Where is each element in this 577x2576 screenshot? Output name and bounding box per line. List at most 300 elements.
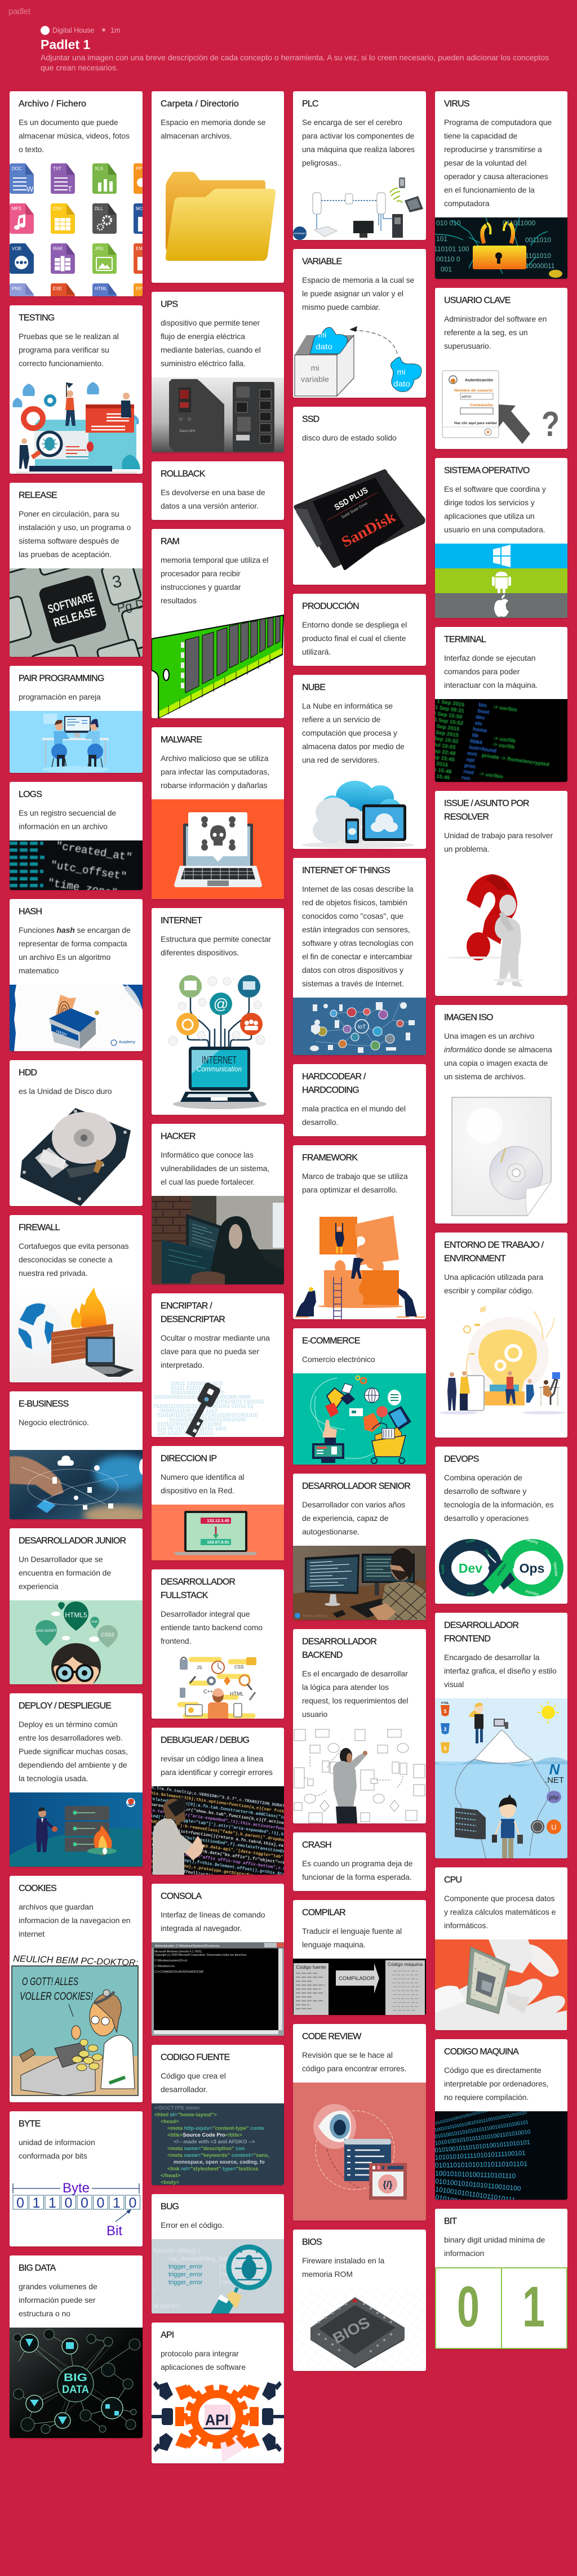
card: DEVOPS [435, 1447, 567, 1604]
image: fullstack developer illustration: C++ [203, 1689, 213, 1694]
card text [444, 312, 547, 353]
image: circuit with padlock: 101 [436, 235, 447, 243]
card text: Informático que conoce las [161, 1150, 254, 1159]
image: byte diagram: 0 [129, 2195, 136, 2211]
image: DevOps infinity loop: deploy [526, 1537, 539, 1545]
image: byte diagram: Byte [63, 2181, 90, 2196]
card text: Puede significar muchas cosas, [19, 1747, 128, 1756]
image: magnifier over bug: var_dump(debug_backtrace()); [168, 2255, 254, 2262]
card title: FRONTEND [444, 1634, 490, 1644]
card title: HARDCODEAR / [302, 1072, 365, 1082]
image: UPS units [152, 377, 284, 452]
card: PAIR PROGRAMMING [10, 666, 143, 773]
card text: superusuario. [444, 341, 491, 350]
image: file type icons: JPG [95, 246, 104, 251]
card text: Poner en circulación, para su [19, 509, 119, 518]
card text: Error en el código. [161, 2221, 224, 2230]
card text: un problema. [444, 844, 490, 853]
image: login form with arrow [435, 361, 567, 449]
image: figure with red question mark [435, 863, 567, 996]
card: PLC [293, 91, 426, 240]
card text: Entorno donde se despliega el [302, 620, 407, 629]
image: powerline network diagram: INTERNET [294, 232, 307, 235]
card text: autogestionarse. [302, 1527, 359, 1536]
card text: Espacio de memoria a la cual se [302, 275, 414, 284]
image: file type icons: W [26, 185, 34, 193]
card: USUARIO CLAVE [435, 288, 567, 449]
card: BIOS [293, 2230, 426, 2371]
image: command prompt window: C:\Windows\system32>cd.. [154, 1959, 188, 1963]
card text [19, 118, 130, 154]
brand: padlet: padlet [8, 7, 30, 16]
author row [41, 26, 120, 35]
image: key on binary code: 01011100101 100 1011000 [157, 1421, 221, 1427]
card text: no requiere compilación. [444, 2093, 529, 2102]
card: DEPLOY / DESPLIEGUE [10, 1693, 143, 1867]
card: ENTORNO DE TRABAJO / ENVIRONMENT [435, 1233, 567, 1438]
image: big data network: BIG [64, 2372, 87, 2384]
card text: robarse información y dañarlas [161, 781, 267, 790]
card text: utilizará. [302, 647, 331, 656]
card text: protocolo para integrar [161, 2349, 239, 2358]
card title: FULLSTACK [161, 1591, 208, 1600]
card text: Pruebas que se le realizan al [19, 332, 119, 341]
card title [444, 797, 529, 824]
image: SanDisk SSD [293, 452, 426, 585]
card: PRODUCCIÓN [293, 594, 426, 666]
card title: ROLLBACK [161, 469, 205, 479]
card text [19, 808, 116, 831]
card: API [152, 2323, 284, 2463]
image: software release key: 3 [110, 572, 123, 592]
card: FIREWALL [10, 1215, 143, 1382]
image: frontend vs backend iceberg: N [549, 1761, 561, 1778]
image: CPU in gloved hand [435, 1939, 567, 2030]
card title: E-COMMERCE [302, 1336, 360, 1346]
card text [161, 1908, 265, 1935]
image: powerline network diagram [293, 177, 426, 240]
image: key on binary code: 1000000000100010100101001000 0000 [154, 1394, 251, 1400]
image: magnifier over bug: trigger_error [168, 2263, 203, 2270]
card text: Cortafuegos que evita personas [19, 1242, 128, 1251]
card text [302, 882, 414, 990]
card text: una máquina que realiza labores [302, 145, 415, 154]
image: variable box with data blobs: mi [397, 367, 405, 376]
card text: archivos que guardan [19, 1902, 94, 1911]
card text: visual [444, 1680, 464, 1689]
card text: memoria temporal que utiliza el [161, 555, 268, 564]
card text: información puede ser [19, 2295, 95, 2304]
image: software release key [10, 568, 143, 657]
image: software release key: RELEASE [52, 605, 98, 630]
image: code review illustration [293, 2083, 426, 2221]
image: terminal listing: lib [472, 732, 479, 739]
card text: revisar un código linea a linea [161, 1754, 263, 1763]
image: byte diagram: 1 [48, 2195, 56, 2211]
card: ROLLBACK [152, 461, 284, 520]
card: INTERNET OF THINGS [293, 858, 426, 1055]
image: terminal listing: -> usr/lib [493, 735, 516, 745]
card: ISSUE / ASUNTO POR RESOLVER [435, 791, 567, 996]
image: laptop with skull warning [152, 799, 284, 899]
image: frontend vs backend iceberg: 3 [443, 1727, 447, 1732]
card text: tecnología de la información, es [444, 1500, 553, 1509]
image: byte diagram: 0 [16, 2195, 24, 2211]
card: TESTING [10, 305, 143, 474]
card title: DESARROLLADOR [161, 1577, 235, 1587]
image: DevOps infinity loop: plan [484, 1548, 492, 1558]
card text [161, 555, 268, 605]
card title: BACKEND [302, 1650, 342, 1660]
image: firewall with globe and laptop [10, 1287, 143, 1382]
card text [444, 482, 546, 536]
card text [444, 1471, 553, 1525]
image: magnifier over bug: ('notice', [219, 2263, 242, 2270]
card: FRAMEWORK [293, 1145, 426, 1319]
card text: Desarrollador integral que [161, 1609, 250, 1618]
card: IMAGEN ISO [435, 1005, 567, 1224]
card title: BIOS [302, 2237, 322, 2247]
card text [161, 2347, 246, 2374]
image: fullstack developer illustration [152, 1655, 284, 1719]
card text: disco duro de estado solido [302, 433, 397, 442]
card title: COMPILAR [302, 1908, 345, 1917]
card title: IMAGEN ISO [444, 1013, 493, 1022]
card text: encuentra en formación de [19, 1568, 111, 1577]
image: disc image file icon [435, 1091, 567, 1224]
image: big data network: DATA [62, 2384, 89, 2396]
image: DevOps infinity loop: monitor [525, 1589, 540, 1597]
card text [444, 2233, 545, 2260]
card text [302, 2254, 384, 2281]
image: source code [152, 2103, 284, 2185]
image: byte diagram [12, 2181, 140, 2239]
card text: de experiencia, capaz de [302, 1514, 388, 1523]
image: terminal listing: private -> /home/encrypted [481, 753, 550, 768]
card text [161, 1331, 270, 1372]
image: binary machine code: 10101010111101010111100101 [435, 2150, 526, 2161]
card title: VARIABLE [302, 257, 341, 266]
image: frontend vs backend iceberg: U [551, 1823, 557, 1831]
card text: Deploy es un término común [19, 1720, 118, 1729]
card text: grandes volumenes de [19, 2282, 97, 2291]
image: variable box with data blobs: mi [318, 330, 326, 339]
image: login form with arrow: Nombre de usuario: [454, 389, 494, 393]
image: source code: <meta name="keywords" content="sans, [167, 2152, 269, 2158]
card text: Código que crea el [161, 2071, 226, 2080]
card title: HDD [19, 1068, 37, 1078]
image: byte diagram: 0 [65, 2195, 72, 2211]
image: circuit with padlock: 00110 0 [436, 255, 460, 263]
image: code and VR woman [152, 1786, 284, 1875]
card text: almacenan archivos. [161, 131, 232, 140]
image: circuit with padlock: 001 [441, 265, 452, 273]
card text [161, 318, 261, 368]
card: HDD [10, 1060, 143, 1206]
card text: procesador para recibir [161, 569, 241, 578]
image: source code: <title>Source Code Pro</title> [167, 2132, 242, 2138]
card title: HARDCODING [302, 1085, 359, 1095]
image: terminal listing: opt [466, 757, 476, 764]
card text: Es el software que coordina y [444, 484, 546, 493]
card title: INTERNET [161, 916, 202, 926]
card text [302, 699, 405, 767]
card text: y realiza cálculos matemáticos e [444, 1907, 556, 1916]
image: key on binary code: 00000111100 0101 1110 [159, 1408, 217, 1414]
card: CODIGO FUENTE [152, 2045, 284, 2185]
card title: ENCRIPTAR / [161, 1301, 212, 1311]
image: login form with arrow: Haz clic aquí para validar [454, 421, 497, 425]
card text: vulnerabilidades de un sistema, [161, 1164, 269, 1173]
card: HASH [10, 899, 143, 1051]
image: login form with arrow: ? [542, 405, 560, 444]
image: terminal listing: bin [478, 702, 487, 709]
card title: SSD [302, 415, 319, 424]
card title: DEVOPS [444, 1454, 479, 1464]
card text: desarrollo y operaciones [444, 1514, 529, 1523]
card text: desconocidas se conecte a [19, 1255, 112, 1264]
image: BIOS chip: BIOS [330, 2313, 372, 2347]
card text: frontend. [161, 1636, 191, 1645]
card text: dependiendo del ambiente y de [19, 1760, 127, 1769]
card text: correcto funcionamiento. [19, 359, 104, 368]
card text: Se encarga de ser el cerebro [302, 118, 402, 127]
image: frontend vs backend iceberg [435, 1698, 567, 1858]
card text: Interfaz donde se ejecutan [444, 653, 535, 662]
card title: PRODUCCIÓN [302, 602, 359, 611]
card text: La Nube en informática se [302, 701, 393, 710]
card text: refiere a un servicio de [302, 715, 380, 724]
card title: DESARROLLADOR JUNIOR [19, 1536, 126, 1546]
card title: BYTE [19, 2119, 40, 2129]
card text: usuario [302, 1710, 327, 1719]
image: terminal listing: root [463, 768, 474, 776]
card: HACKER [152, 1124, 284, 1284]
image: hard disk drive [20, 1108, 131, 1206]
card text: Programa de computadora que [444, 118, 552, 127]
card text: computación que procesa y [302, 728, 397, 737]
card text: Administrador del software en [444, 314, 547, 323]
image: senior developer photo: Tecno Adictos [303, 1614, 327, 1618]
card title: INTERNET OF THINGS [302, 866, 390, 875]
image: DevOps infinity loop: release [495, 1563, 508, 1577]
image: fullstack developer illustration: JS [197, 1665, 202, 1670]
image: terminal listing: lost+found [469, 744, 497, 754]
card text: una red de servidores. [302, 755, 379, 764]
card text: software y otras tecnologías con [302, 938, 414, 947]
image: magnifier over bug: trigger_error [168, 2271, 203, 2278]
card text [444, 2063, 548, 2104]
card title: API [161, 2330, 174, 2340]
image: compiler diagram: COMPILADOR [339, 1976, 375, 1982]
card: VIRUS [435, 91, 567, 279]
image: hash machine with fingerprint: Academy [119, 1040, 136, 1044]
card title: BIT [444, 2217, 456, 2226]
image: magnifier over bug: a('alpha'); [153, 2303, 180, 2310]
card text [161, 118, 265, 140]
image: command prompt window: C:\Windows>cd.. [154, 1965, 176, 1968]
card text: red de objetos físicos, también [302, 898, 407, 907]
image: junior developer with language balloons [10, 1600, 143, 1684]
image: file type icons: MP3 [12, 206, 21, 211]
image: magnifier over bug: ('error', [219, 2279, 238, 2286]
card text [161, 1150, 269, 1186]
image: internet communication tree [168, 975, 267, 1109]
image: command prompt window: Microsoft Windows [Versión 6.1.7601] [154, 1950, 202, 1954]
card text: memoria ROM [302, 2270, 353, 2279]
card text [302, 1169, 408, 1196]
card text: la tecnología usada. [19, 1774, 88, 1783]
card title: RAM [161, 537, 179, 546]
card text: usuario en una computadora. [444, 525, 545, 534]
card title: CODIGO MAQUINA [444, 2047, 518, 2057]
image: terminal listing: boot [477, 708, 490, 716]
card text: reproducirse y transmitirse a [444, 145, 542, 154]
card text [444, 1650, 557, 1691]
card title: HACKER [161, 1132, 196, 1141]
card title: Archivo / Fichero [19, 99, 86, 109]
card text: el cual las puede fortalecer. [161, 1177, 255, 1186]
image: frontend vs backend iceberg: HTML [441, 1702, 449, 1705]
image: terminal listing: dev [476, 714, 486, 722]
card text: informáticos. [444, 1921, 488, 1930]
card text: mediante baterías, cuando el [161, 345, 261, 354]
image: source code: monospace, open source, coding, fo [174, 2159, 265, 2165]
image: key on binary code: 10011 10101001 10 0 [171, 1381, 223, 1387]
image: source code: <!-- made with <3 and AFDKO --> [174, 2139, 255, 2145]
image: frontend vs backend iceberg: .NET [545, 1776, 564, 1785]
card text: desarrollo de software y [444, 1487, 526, 1496]
card text: interactuar con la máquina. [444, 680, 538, 689]
card text: resultados [161, 596, 197, 605]
image: byte diagram: 1 [113, 2195, 121, 2211]
card: INTERNET [152, 908, 284, 1115]
card text [161, 1470, 245, 1497]
card text: es la Unidad de Disco duro [19, 1087, 112, 1096]
card text [302, 1924, 402, 1951]
card text [19, 1555, 111, 1591]
card text: aplicaciones de software [161, 2363, 246, 2372]
card: CODE REVIEW [293, 2024, 426, 2221]
image: terminal listing: -> usr/lib [492, 741, 515, 750]
card: DESARROLLADOR BACKEND [293, 1629, 426, 1823]
card text [19, 2138, 95, 2160]
image: terminal listing: run [461, 775, 471, 782]
card text [161, 1752, 273, 1779]
card title [444, 1239, 543, 1266]
image: junior developer with language balloons: HTML5 [65, 1611, 87, 1619]
image: login form with arrow: Contraseña: [470, 403, 494, 407]
image: compiler diagram [293, 1959, 426, 2015]
image: file type icons: DLL [95, 206, 103, 211]
image: cloud and devices [293, 774, 426, 849]
card text: Encargado de desarrollar la [444, 1653, 539, 1662]
card text: Numero que identifica al [161, 1472, 245, 1481]
card title: MALWARE [161, 735, 202, 745]
image: magnifier over bug: trigger_error [168, 2279, 203, 2286]
image: digital business hand [10, 1450, 143, 1519]
card text: desarrollador. [161, 2085, 207, 2094]
image: hooded hacker photo [152, 1196, 284, 1284]
card: E-BUSINESS [10, 1391, 143, 1519]
image: SanDisk SSD: Solid State Drive [341, 501, 369, 519]
card text: instalación y uso, un programa o [19, 523, 131, 532]
image: puzzle team illustration [293, 1204, 426, 1319]
card text: Espacio en memoria donde se [161, 118, 265, 127]
card text: entiende tanto backend como [161, 1623, 263, 1632]
image: byte diagram: 0 [81, 2195, 88, 2211]
age: 1m [110, 26, 120, 34]
card text: referente a la seg, es un [444, 328, 527, 337]
image: bit cells 0 and 1 [435, 2267, 567, 2349]
card: E-COMMERCE [293, 1328, 426, 1465]
card title: CODIGO FUENTE [161, 2053, 229, 2062]
image: login form with arrow: admin [461, 395, 472, 399]
card text: producto final el cual el cliente [302, 634, 406, 643]
image: yellow folder [166, 172, 276, 261]
card text: dirige todos los servicios y [444, 498, 535, 507]
card title: DEBUGUEAR / DEBUG [161, 1736, 249, 1745]
card text: Es devolverse en una base de [161, 488, 265, 497]
image: bit cells 0 and 1: 0 [457, 2275, 480, 2339]
card text: Es un documento que puede [19, 118, 118, 127]
image: key on binary code: 0101001101000101010010100101001010 [157, 1412, 258, 1418]
card: CONSOLA [152, 1884, 284, 2036]
image: circuit with padlock: 011011000 [503, 219, 536, 227]
card text: sistema software después de [19, 536, 119, 545]
card text: Unidad de trabajo para resolver [444, 831, 553, 840]
image: PC doctor comic: NEULICH BEIM PC-DOKTOR: [13, 1954, 138, 1968]
card title [444, 1619, 518, 1646]
image: variable box with data blobs [293, 321, 426, 398]
card text: flujo de energía eléctrica [161, 332, 245, 341]
card title: NUBE [302, 683, 325, 692]
image: file type icons: CSV [53, 206, 63, 211]
card text: Traducir el lenguaje fuente al [302, 1927, 402, 1936]
card text: Es un registro secuencial de [19, 808, 116, 817]
card text: Ocultar o mostrar mediante una [161, 1333, 270, 1342]
separator dot [102, 28, 105, 32]
image: junior developer with language balloons: PHP [91, 1621, 98, 1624]
card: DIRECCION IP [152, 1446, 284, 1560]
author name: Digital House [52, 26, 94, 34]
card title: DIRECCION IP [161, 1454, 216, 1463]
image: internet communication tree: Communication [197, 1065, 242, 1073]
image: blurred log text [10, 840, 143, 890]
image: DevOps infinity loop: Ops [520, 1561, 544, 1576]
image: frontend vs backend iceberg: 5 [443, 1709, 447, 1714]
image: junior developer with language balloons: JAVA SCRIPT [35, 1630, 57, 1633]
image: binary machine code: 0101001011010101011100101010100101 [435, 2119, 529, 2139]
image: source code: <head> [161, 2119, 179, 2124]
image: key on binary code: 10 10100101101 0101011 [202, 1399, 264, 1405]
image: frontend vs backend iceberg: 5 [443, 1746, 447, 1751]
card text [19, 332, 119, 368]
card text [19, 2282, 97, 2318]
image: DevOps infinity loop [435, 1532, 567, 1604]
card text: Combina operación de [444, 1473, 522, 1482]
image: server on fire [10, 1792, 143, 1867]
card text: almacena datos por medio de [302, 742, 405, 751]
card title: DESARROLLADOR SENIOR [302, 1481, 410, 1491]
card text: están integrados con sensores, [302, 925, 410, 934]
card: DESARROLLADOR FULLSTACK [152, 1569, 284, 1719]
card: HARDCODEAR / HARDCODING [293, 1064, 426, 1136]
card text [19, 509, 131, 559]
card text: un sistema de archivos. [444, 1072, 526, 1081]
card title [302, 1070, 365, 1097]
image: fullstack developer illustration: HTML [230, 1691, 243, 1697]
